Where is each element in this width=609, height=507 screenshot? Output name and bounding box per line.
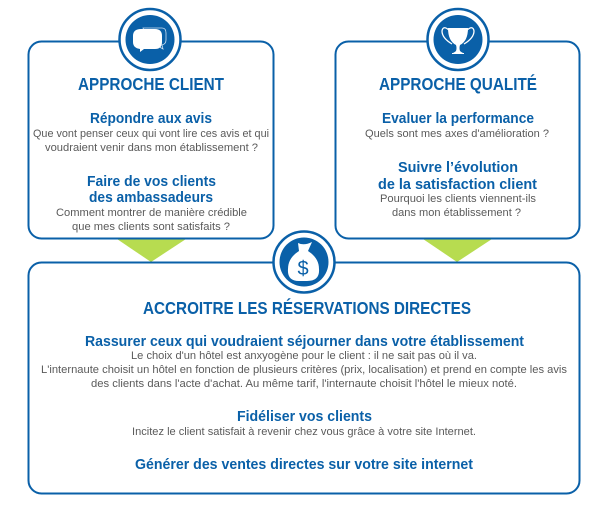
text block: répondre aux avis: voudraient venir dans mon établissement ? <box>45 142 258 154</box>
text block: fidéliser: Fidéliser vos clients <box>237 408 372 425</box>
text block: ambassadeurs <box>56 173 247 233</box>
heading: approche client: APPROCHE CLIENT <box>78 74 224 94</box>
text block: répondre aux avis: Que vont penser ceux qui vont lire ces avis et qui <box>33 128 269 140</box>
text block: évaluer la performance: Quels sont mes axes d'amélioration ? <box>365 128 549 140</box>
text block: évaluer la performance <box>365 110 549 140</box>
text block: rassurer: Le choix d'un hôtel est anxyogène pour le client : il ne sait pas où il va. <box>131 350 477 362</box>
text block: répondre aux avis <box>33 110 269 154</box>
text block: rassurer: L'internaute choisit un hôtel en fonction de plusieurs critères (prix, localisation) et prend en compte les avis <box>41 364 568 376</box>
text block: rassurer: Rassurer ceux qui voudraient séjourner dans votre établissement <box>85 333 524 350</box>
arrow: right green triangle <box>423 239 492 262</box>
text block: rassurer <box>41 333 568 390</box>
text block: évaluer la performance: Evaluer la performance <box>382 110 534 127</box>
icon: money bag <box>274 232 334 292</box>
text block: fidéliser: Incitez le client satisfait à revenir chez vous grâce à votre site Internet. <box>132 426 476 438</box>
arrow: left green triangle <box>117 239 186 262</box>
heading: accroitre les réservations directes: ACCROITRE LES RÉSERVATIONS DIRECTES <box>143 297 471 318</box>
text block: rassurer: des clients dans l'acte d'achat. Au même tarif, l'internaute choisit l'hôtel le mieux noté. <box>91 378 517 390</box>
text block: suivre l'évolution: dans mon établissement ? <box>392 207 521 219</box>
text block: suivre l'évolution: de la satisfaction client <box>378 176 537 193</box>
heading: approche qualité: APPROCHE QUALITÉ <box>379 73 537 94</box>
text block: ambassadeurs: des ambassadeurs <box>89 189 213 206</box>
panel: approche qualité <box>336 42 580 238</box>
text block: répondre aux avis: Répondre aux avis <box>90 110 212 127</box>
icon: speech bubbles <box>120 9 180 70</box>
text block: ambassadeurs: Faire de vos clients <box>87 173 216 190</box>
text block: ambassadeurs: Comment montrer de manière crédible <box>56 207 247 219</box>
text block: générer: Générer des ventes directes sur votre site internet <box>135 456 473 473</box>
text block: fidéliser <box>132 408 476 438</box>
icon: money bag: $ <box>297 258 309 280</box>
text block: suivre l'évolution <box>378 159 537 219</box>
icon: trophy <box>428 9 488 70</box>
text block: ambassadeurs: que mes clients sont satisfaits ? <box>72 221 230 233</box>
panel: approche client <box>28 42 274 238</box>
text block: suivre l'évolution: Pourquoi les clients viennent-ils <box>380 193 536 205</box>
panel: accroitre les réservations directes <box>28 262 580 494</box>
text block: suivre l'évolution: Suivre l’évolution <box>398 159 518 176</box>
